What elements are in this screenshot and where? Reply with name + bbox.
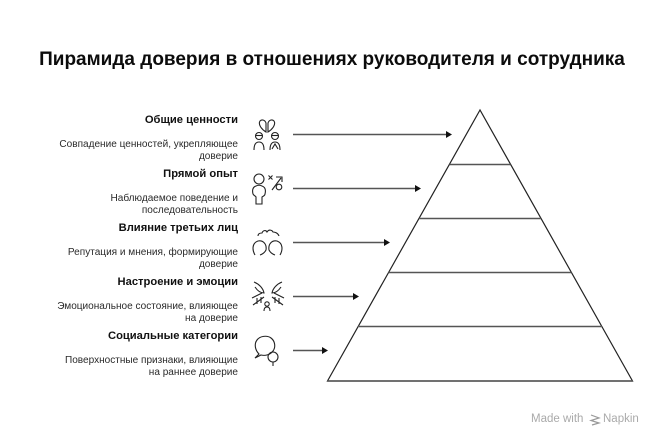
icon: speech bubble with small bubble xyxy=(255,336,278,366)
text block: third party influence: Репутация и мнения, формирующие xyxy=(68,246,238,258)
text block: direct experience: Прямой опыт xyxy=(163,168,238,180)
icon: two people with a cloud above xyxy=(253,230,282,255)
icon: person with tactical marks xyxy=(253,174,282,204)
text block: shared values: Общие ценности xyxy=(145,114,238,126)
text block: social categories xyxy=(65,330,238,378)
text block: third party influence: доверие xyxy=(199,259,238,270)
arrow: level 3 xyxy=(293,239,390,246)
pyramid xyxy=(328,110,632,381)
text block: mood and emotions xyxy=(57,276,238,324)
icon: mirrored emotional bursts xyxy=(252,282,284,311)
text block: third party influence: Влияние третьих лиц xyxy=(119,222,238,234)
arrow: level 1 xyxy=(293,131,452,138)
text block: shared values: доверие xyxy=(199,151,238,162)
arrow: level 2 xyxy=(293,185,421,192)
arrow: level 4 xyxy=(293,293,359,300)
text block: mood and emotions: на доверие xyxy=(185,313,238,324)
watermark: Napkin: Napkin xyxy=(603,413,639,425)
text block: shared values: Совпадение ценностей, укрепляющее xyxy=(59,138,238,150)
text block: direct experience: последовательность xyxy=(142,205,238,216)
text block: third party influence xyxy=(68,222,238,270)
watermark: Made with xyxy=(531,413,583,425)
arrow: level 5 xyxy=(293,347,328,354)
title: Пирамида доверия в отношениях руководителя и сотрудника xyxy=(39,49,625,70)
text block: social categories: Социальные категории xyxy=(108,330,238,342)
icon: Napkin logo xyxy=(591,415,599,425)
text block: social categories: на раннее доверие xyxy=(149,367,238,378)
text block: direct experience xyxy=(111,168,238,216)
text block: mood and emotions: Настроение и эмоции xyxy=(118,276,238,288)
text block: social categories: Поверхностные признаки, влияющие xyxy=(65,354,238,366)
text block: shared values xyxy=(59,114,238,162)
text block: direct experience: Наблюдаемое поведение и xyxy=(111,192,238,204)
text block: mood and emotions: Эмоциональное состояние, влияющее xyxy=(57,300,238,312)
icon: two people and a split heart xyxy=(254,120,280,150)
